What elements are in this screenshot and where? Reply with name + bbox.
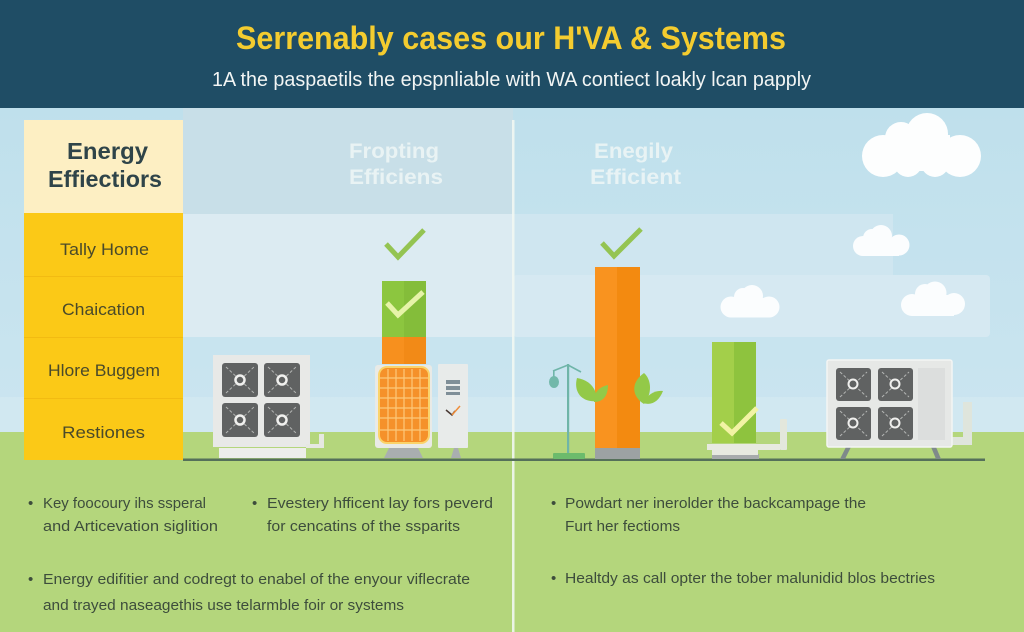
ground line	[183, 458, 985, 461]
text block: bullets left column 2: Evestery hfficent lay fors peverd	[267, 495, 493, 512]
divider	[512, 120, 514, 632]
text block: bullets left column 1	[28, 495, 218, 535]
column heading: left: Fropting	[349, 140, 439, 163]
right fan unit	[827, 360, 972, 459]
fan	[878, 368, 913, 401]
green bar	[707, 342, 787, 459]
text block: bullets left column 1: and Articevation siglition	[43, 518, 218, 535]
text block: bullet left lower: •	[28, 571, 33, 588]
panel heading	[48, 138, 162, 192]
icon: check above orange bar	[602, 229, 641, 256]
fan	[836, 407, 871, 440]
icon: lamp post	[549, 364, 585, 459]
title: Serrenably cases our H'VA & Systems	[236, 20, 786, 56]
panel heading: Effiectiors	[48, 166, 162, 192]
icon: leaves	[576, 373, 663, 404]
fan	[836, 368, 871, 401]
icon: check above stack	[386, 230, 424, 257]
column heading: right: Enegily	[594, 140, 673, 163]
text block: bullet left lower: and trayed naseagethis use telarmble foir or systems	[43, 597, 404, 614]
fan	[878, 407, 913, 440]
text block: bullets left column 2: for cencatins of the ssparits	[267, 518, 460, 535]
text block: bullet left lower	[28, 571, 470, 614]
text block: bullet right lower: Healtdy as call opter the tober malunidid blos bectries	[565, 570, 935, 587]
fan	[264, 403, 300, 437]
text block: bullets left column 2: •	[252, 495, 257, 512]
fan	[222, 363, 258, 397]
orange bar	[595, 267, 640, 459]
text block: bullet right upper: Powdart ner inerolder the backcampage the	[565, 495, 866, 512]
list item: Restiones	[62, 423, 145, 442]
list item: Hlore Buggem	[48, 361, 160, 380]
icon: small cloud	[853, 225, 910, 256]
text block: bullet right lower: •	[551, 570, 556, 587]
filter unit	[375, 365, 432, 458]
text block: bullets left column 1: Key foocoury ihs ssperal	[43, 495, 206, 512]
list item: Chaication	[62, 300, 145, 319]
panel heading: Energy	[67, 138, 148, 164]
fan	[264, 363, 300, 397]
icon: large cloud	[862, 113, 981, 177]
text block: bullet right upper: Furt her fectioms	[565, 518, 680, 535]
text block: bullets left column 2	[252, 495, 493, 535]
text block: bullets left column 1: •	[28, 495, 33, 512]
icon: small cloud	[901, 282, 965, 316]
column heading: left	[349, 140, 443, 189]
column heading: left: Efficiens	[349, 166, 443, 189]
subtitle: 1A the paspaetils the epspnliable with WA contiect loakly lcan papply	[212, 69, 811, 91]
text block: bullet right upper: •	[551, 495, 556, 512]
side panel	[438, 364, 468, 458]
column heading: right: Efficient	[590, 166, 681, 189]
ground	[0, 432, 1024, 632]
fan	[222, 403, 258, 437]
left fan unit	[213, 355, 324, 458]
text block: bullet left lower: Energy edifitier and codregt to enabel of the enyour viflecrate	[43, 571, 470, 588]
icon: small cloud	[720, 285, 780, 318]
list item: Tally Home	[60, 240, 149, 259]
panel: energy efficiency list	[24, 120, 183, 460]
middle stacked bar	[382, 281, 426, 364]
column heading: right	[590, 140, 681, 189]
header banner	[0, 0, 1024, 108]
text block: bullet right upper	[551, 495, 866, 535]
